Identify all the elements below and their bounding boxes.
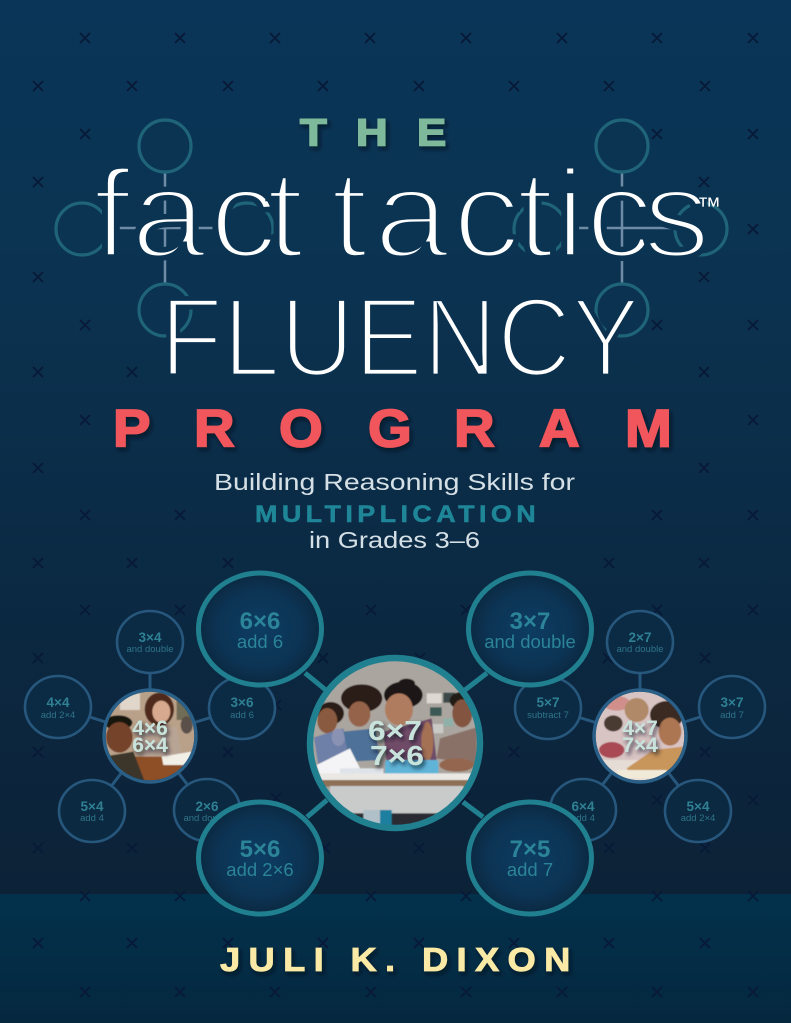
author name: JULI K. DIXON	[220, 942, 579, 979]
big node: 6×6	[198, 573, 322, 685]
satellite: 3×6: 3×6	[231, 695, 254, 710]
satellite: 3×6	[209, 677, 275, 739]
big node: 3×7	[468, 573, 592, 685]
satellite: 5×4: 5×4	[81, 799, 104, 814]
left photo label	[132, 717, 168, 757]
satellite: 3×4: 3×4	[139, 630, 162, 645]
central photo node	[306, 654, 484, 832]
satellite: 3×6: add 6	[230, 710, 254, 721]
satellite: 3×7: add 7	[720, 710, 744, 721]
central photo label	[368, 715, 424, 771]
satellite: 5×4 right	[665, 780, 731, 842]
title: fact tactics: facttactics	[93, 143, 711, 284]
kid one	[317, 702, 344, 725]
heading: PROGRAM: PROGRAM	[113, 399, 672, 458]
big node: 5×6: 5×6	[240, 836, 280, 863]
big node: 7×5: add 7	[507, 859, 553, 880]
subtitle: Building Reasoning Skills for	[214, 469, 575, 495]
right photo label	[622, 717, 658, 757]
satellite: 5×4: add 4	[80, 813, 104, 824]
heading: THE: THE	[300, 111, 446, 154]
kid three	[384, 682, 423, 708]
subtitle emphasis: MULTIPLICATION	[255, 501, 540, 528]
satellite: 2×6: 2×6	[196, 799, 219, 814]
satellite: 5×7: 5×7	[537, 695, 559, 710]
satellite: 2×7: 2×7	[629, 630, 651, 645]
central photo label: 6×7	[368, 715, 422, 746]
satellite: 2×6	[174, 779, 240, 841]
subtitle	[214, 469, 575, 553]
trademark: ™	[697, 193, 721, 220]
satellite: 5×4 right: add 2×4	[681, 813, 715, 824]
satellite: 3×7	[699, 676, 765, 738]
satellite: 5×7	[515, 677, 581, 739]
kid two	[341, 684, 382, 712]
right photo node	[590, 687, 690, 787]
right cluster connectors	[548, 642, 732, 811]
satellite: 3×7: 3×7	[721, 695, 743, 710]
big node: 7×5: 7×5	[510, 836, 550, 863]
satellite: 4×4: add 2×4	[41, 710, 75, 721]
bottom author band	[0, 894, 791, 1023]
central photo label: 7×6	[370, 740, 424, 771]
satellite: 2×7: and double	[616, 644, 664, 655]
title: FLUENCY: FLUENCY	[160, 275, 640, 400]
left photo node	[100, 687, 200, 787]
left cluster connectors	[58, 642, 242, 811]
right photo label: 4×7	[622, 717, 658, 740]
satellite: 5×4	[59, 780, 125, 842]
satellite: 3×4: and double	[126, 644, 174, 655]
satellite: 4×4: 4×4	[47, 695, 70, 710]
kid four	[449, 692, 464, 708]
main connectors	[305, 673, 487, 817]
big node: 7×5	[468, 802, 592, 914]
left photo label: 6×4	[132, 734, 168, 757]
satellite: 5×7: subtract 7	[527, 710, 569, 721]
big node: 3×7: and double	[484, 631, 576, 652]
big node: 5×6: add 2×6	[226, 859, 294, 880]
big node: 6×6: add 6	[237, 631, 283, 652]
satellite: 6×4: 6×4	[572, 799, 595, 814]
big node: 5×6	[198, 802, 322, 914]
big node: 6×6: 6×6	[240, 608, 280, 635]
satellite: 2×7	[607, 611, 673, 673]
left photo label: 4×6	[132, 717, 168, 740]
satellite: 2×6: and double	[183, 813, 231, 824]
satellite: 6×4: add 4	[571, 813, 595, 824]
satellite: 4×4	[25, 676, 91, 738]
books and desk	[317, 748, 363, 775]
grade range: in Grades 3–6	[309, 527, 480, 553]
decorative network: right	[514, 120, 727, 336]
satellite: 3×4	[117, 611, 183, 673]
big node: 3×7: 3×7	[510, 608, 550, 635]
right photo label: 7×4	[622, 734, 658, 757]
decorative network: left	[56, 120, 273, 336]
satellite: 6×4	[550, 779, 616, 841]
satellite: 5×4 right: 5×4	[687, 799, 710, 814]
